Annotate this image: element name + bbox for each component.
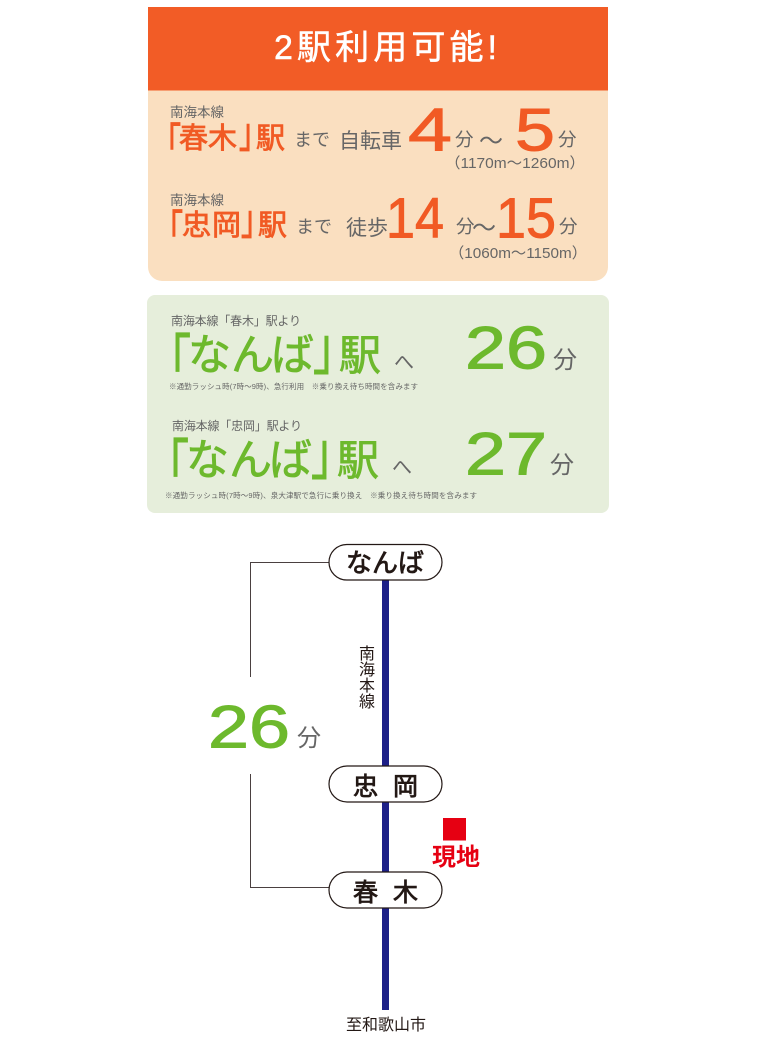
- unit: 分: [456, 216, 475, 237]
- made: まで: [296, 217, 332, 237]
- total time: [208, 694, 321, 760]
- minutes 27: 27: [465, 420, 547, 488]
- unit: 分: [297, 725, 321, 752]
- station: Namba: [329, 544, 442, 580]
- destination: [148, 317, 381, 396]
- header band: [148, 7, 608, 90]
- destination: 駅: [337, 437, 379, 484]
- station name: 忠岡: [182, 210, 241, 242]
- panel: travel time to Namba: [146, 295, 609, 513]
- destination: 「: [148, 329, 191, 396]
- bracket: upper: [250, 562, 329, 677]
- note: ※通勤ラッシュ時(7時〜9時)、急行利用 ※乗り換え待ち時間を含みます: [169, 381, 418, 391]
- to: へ: [392, 457, 412, 479]
- railway line: [382, 578, 389, 1010]
- unit: 分: [558, 129, 577, 150]
- unit: 分: [553, 347, 577, 374]
- station name: 駅: [258, 210, 287, 242]
- destination: なんば: [188, 332, 314, 380]
- pill: [329, 544, 442, 580]
- to: へ: [394, 352, 414, 374]
- station: Haruki: [329, 872, 442, 908]
- panel background: [148, 7, 608, 281]
- station name: 「: [154, 208, 183, 253]
- site marker: [443, 818, 466, 840]
- station name: 「: [152, 121, 181, 166]
- destination: 」: [311, 422, 354, 487]
- name: 忠岡: [353, 773, 418, 801]
- unit: 分: [550, 452, 574, 479]
- row: from Haruki: [148, 313, 577, 396]
- route label: 南海本線「春木」駅より: [171, 313, 301, 328]
- destination: 「: [146, 434, 189, 501]
- tilde: 〜: [479, 128, 503, 155]
- station name: [154, 198, 287, 253]
- minutes 14: 14: [386, 186, 444, 250]
- line label: 南海本線: [170, 193, 224, 208]
- minutes 4: 4: [408, 96, 452, 164]
- site label: 現地: [432, 844, 480, 871]
- bracket: lower: [250, 774, 329, 888]
- made: まで: [294, 130, 330, 150]
- name: 春木: [353, 879, 418, 907]
- destination: 」: [313, 317, 356, 382]
- panel background: [147, 295, 609, 513]
- destination: [146, 422, 379, 501]
- station name: 」: [241, 198, 270, 243]
- destination: 駅: [339, 332, 381, 379]
- minutes 26: 26: [465, 314, 547, 382]
- pill: [329, 872, 442, 908]
- minutes 15: 15: [496, 186, 556, 250]
- unit: 分: [455, 129, 474, 150]
- note: ※通勤ラッシュ時(7時〜9時)、泉大津駅で急行に乗り換え ※乗り換え待ち時間を含みます: [165, 490, 477, 500]
- title: 2駅利用可能!: [274, 29, 497, 67]
- distance: （1060m〜1150m）: [449, 245, 587, 262]
- station name: [152, 111, 285, 166]
- pill: [329, 766, 442, 802]
- station name: 」: [239, 111, 268, 156]
- row: Tadaoka station on foot: [154, 186, 587, 262]
- station: Tadaoka: [329, 766, 442, 802]
- station name: 駅: [256, 123, 285, 155]
- panel: access to the two stations: [148, 7, 608, 281]
- line label: 南海本線: [170, 105, 224, 120]
- line name: 南海本線: [359, 645, 375, 711]
- name: なんば: [346, 548, 424, 578]
- route map: [208, 544, 480, 1034]
- row: from Tadaoka: [146, 418, 574, 501]
- minutes 5: 5: [515, 96, 555, 164]
- bicycle: 自転車: [339, 130, 402, 153]
- route label: 南海本線「忠岡」駅より: [172, 418, 302, 433]
- station name: 春木: [179, 122, 237, 155]
- destination: なんば: [186, 437, 312, 485]
- minutes 26: 26: [208, 694, 290, 760]
- distance: （1170m〜1260m）: [445, 155, 585, 172]
- row: Haruki station by bicycle: [152, 96, 585, 172]
- destination label: 至和歌山市: [346, 1016, 426, 1034]
- unit: 分: [559, 216, 578, 237]
- on foot: 徒歩: [346, 217, 388, 240]
- tilde: 〜: [472, 215, 496, 242]
